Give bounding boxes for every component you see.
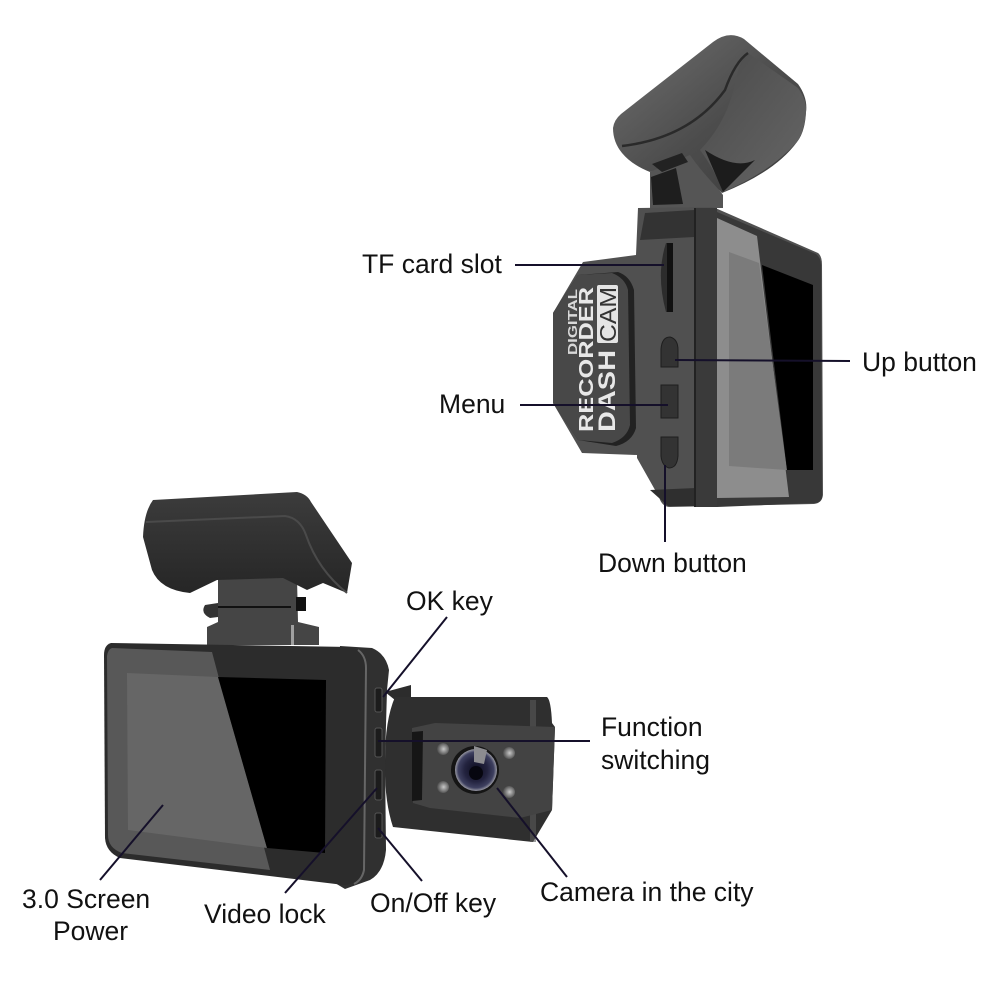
line: menu <box>520 404 668 406</box>
line: down button <box>664 465 666 542</box>
line: video lock <box>285 788 377 893</box>
line: camera <box>497 788 567 877</box>
label: Up button: Up button <box>862 347 977 377</box>
line: screen <box>100 805 163 880</box>
badge: DIGITAL RECORDER DASH CAM <box>553 272 636 446</box>
dash cam: side view <box>553 35 823 507</box>
LED: top right <box>503 747 515 759</box>
label: TF card slot: TF card slot <box>362 249 503 279</box>
label: OK key: OK key <box>406 586 494 616</box>
label: Camera in the city: Camera in the city <box>540 877 754 907</box>
badge: DIGITAL RECORDER DASH CAM: RECORDER <box>576 286 598 432</box>
menu button <box>661 385 678 418</box>
LED: bottom right <box>503 786 515 798</box>
line: TF card slot <box>515 264 664 266</box>
line: on/off key <box>378 828 422 881</box>
LED: top left <box>437 743 449 755</box>
camera head with lens <box>385 685 555 842</box>
up button <box>661 337 678 367</box>
label: On/Off key: On/Off key <box>370 888 497 918</box>
camera body and screen: rear <box>104 643 389 889</box>
label: Function switching: Function <box>601 712 703 742</box>
label: Down button: Down button <box>598 548 747 578</box>
badge: DIGITAL RECORDER DASH CAM: CAM <box>595 287 621 342</box>
dash cam: rear view with lens <box>104 492 555 889</box>
badge: DIGITAL RECORDER DASH CAM: DIGITAL <box>565 289 580 355</box>
labels <box>22 249 977 946</box>
mount: adhesive dome top device <box>613 35 806 208</box>
label: Function switching: switching <box>601 745 710 775</box>
TF card slot <box>661 243 673 312</box>
label: Menu: Menu <box>439 389 505 419</box>
LED: bottom left <box>437 781 449 793</box>
camera lens <box>451 746 499 794</box>
down button <box>661 437 678 468</box>
side buttons <box>375 688 382 838</box>
line: function switching <box>378 740 590 742</box>
camera body: side <box>553 207 823 507</box>
label: 3.0 Screen Power: 3.0 Screen <box>22 884 150 914</box>
line: OK key <box>383 617 447 697</box>
label: 3.0 Screen Power: Power <box>53 916 128 946</box>
label: Video lock: Video lock <box>204 899 327 929</box>
screen: side view <box>717 212 822 507</box>
callout lines <box>100 265 850 893</box>
mount: adhesive pad bottom device <box>143 492 352 645</box>
badge: DIGITAL RECORDER DASH CAM: DASH <box>594 350 621 432</box>
line: up button <box>675 360 850 361</box>
